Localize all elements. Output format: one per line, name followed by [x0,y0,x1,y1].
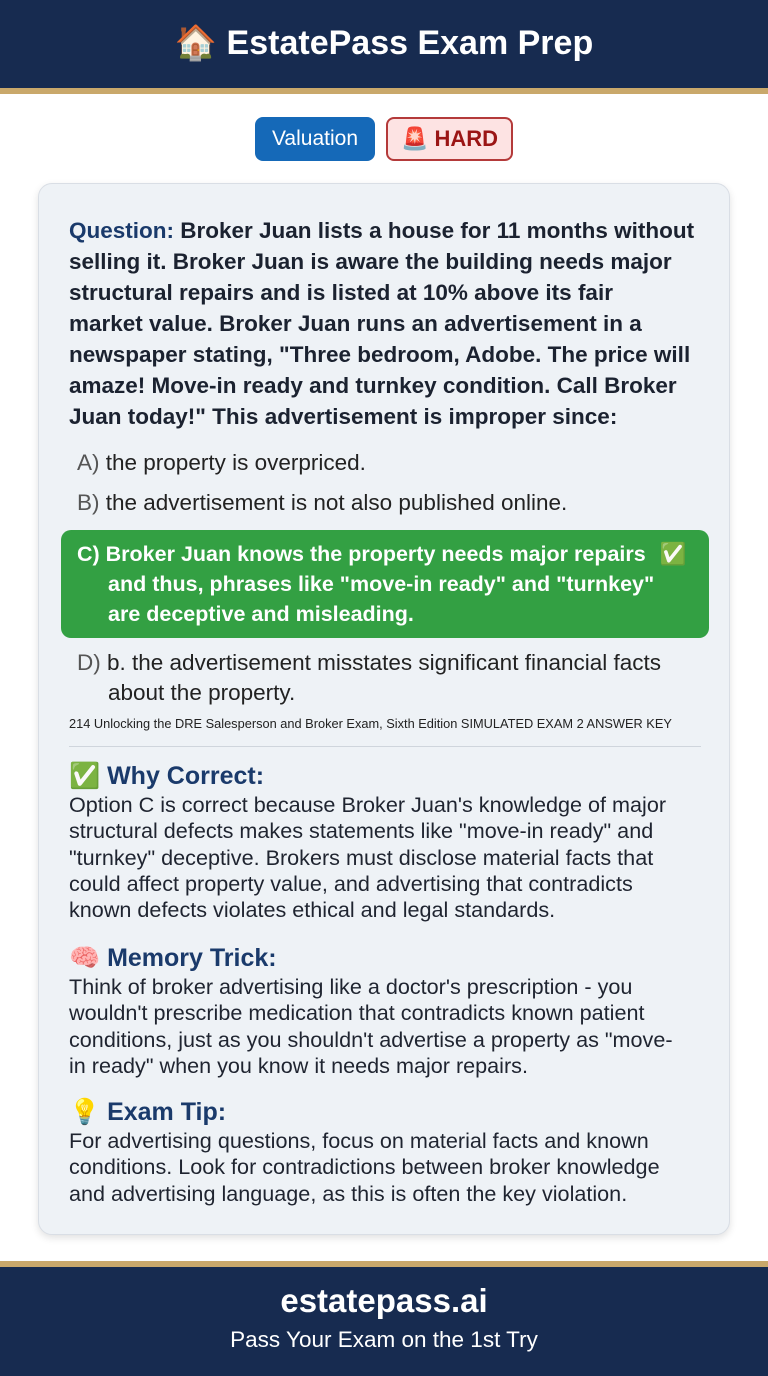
footer site: estatepass.ai [280,1282,488,1319]
badge: difficulty [386,117,513,161]
body: structural defects makes statements like "move-in ready" and [69,818,653,843]
question: Juan today!" This advertisement is improper since: [69,404,617,429]
question [69,218,694,429]
body [69,1128,660,1206]
option C correct: and thus, phrases like "move-in ready" and "turnkey" [108,572,654,596]
heading: ✅ Why Correct: [69,762,264,790]
footer tagline: Pass Your Exam on the 1st Try [230,1327,538,1352]
body: Option C is correct because Broker Juan's knowledge of major [69,792,666,817]
body: could affect property value, and advertising that contradicts [69,871,633,896]
question: amaze! Move-in ready and turnkey condition. Call Broker [69,373,677,398]
badge: category: Valuation [272,127,358,150]
card [38,183,730,1235]
question: newspaper stating, "Three bedroom, Adobe. The price will [69,342,690,367]
body [69,974,673,1078]
option D: D) b. the advertisement misstates significant financial facts [77,650,661,675]
body: conditions. Look for contradictions between broker knowledge [69,1154,660,1179]
body: known defects violates ethical and legal standards. [69,897,555,922]
option B: B) the advertisement is not also published online. [77,490,567,515]
heading: 💡 Exam Tip: [69,1098,226,1126]
option C correct [61,530,709,638]
body [69,792,666,922]
header [0,0,768,94]
badge: category [255,117,375,161]
body: Think of broker advertising like a doctor's prescription - you [69,974,632,999]
body: wouldn't prescribe medication that contradicts known patient [69,1000,644,1025]
section: exam tip [69,1098,660,1206]
question: market value. Broker Juan runs an advertisement in a [69,311,642,336]
question: selling it. Broker Juan is aware the building needs major [69,249,672,274]
footer [0,1261,768,1376]
question: Question: Broker Juan lists a house for 11 months without [69,218,694,243]
section: why correct [69,762,666,922]
option D: about the property. [108,680,295,705]
option C correct: are deceptive and misleading. [108,602,414,626]
section: memory trick [69,944,673,1078]
source note: 214 Unlocking the DRE Salesperson and Broker Exam, Sixth Edition SIMULATED EXAM 2 ANSWER KEY [69,716,672,731]
question: structural repairs and is listed at 10% above its fair [69,280,613,305]
option A: A) the property is overpriced. [77,450,366,475]
body: "turnkey" deceptive. Brokers must disclose material facts that [69,845,653,870]
body: and advertising language, as this is often the key violation. [69,1181,627,1206]
body: For advertising questions, focus on material facts and known [69,1128,649,1153]
body: in ready" when you know it needs major repairs. [69,1053,528,1078]
heading: 🧠 Memory Trick: [69,944,277,972]
option D [77,650,661,705]
option C correct: C) Broker Juan knows the property needs major repairs ✅ [77,542,686,566]
body: conditions, just as you shouldn't advertise a property as "move- [69,1027,673,1052]
title: 🏠 EstatePass Exam Prep [175,24,593,62]
badge: difficulty: 🚨 HARD [401,126,498,151]
